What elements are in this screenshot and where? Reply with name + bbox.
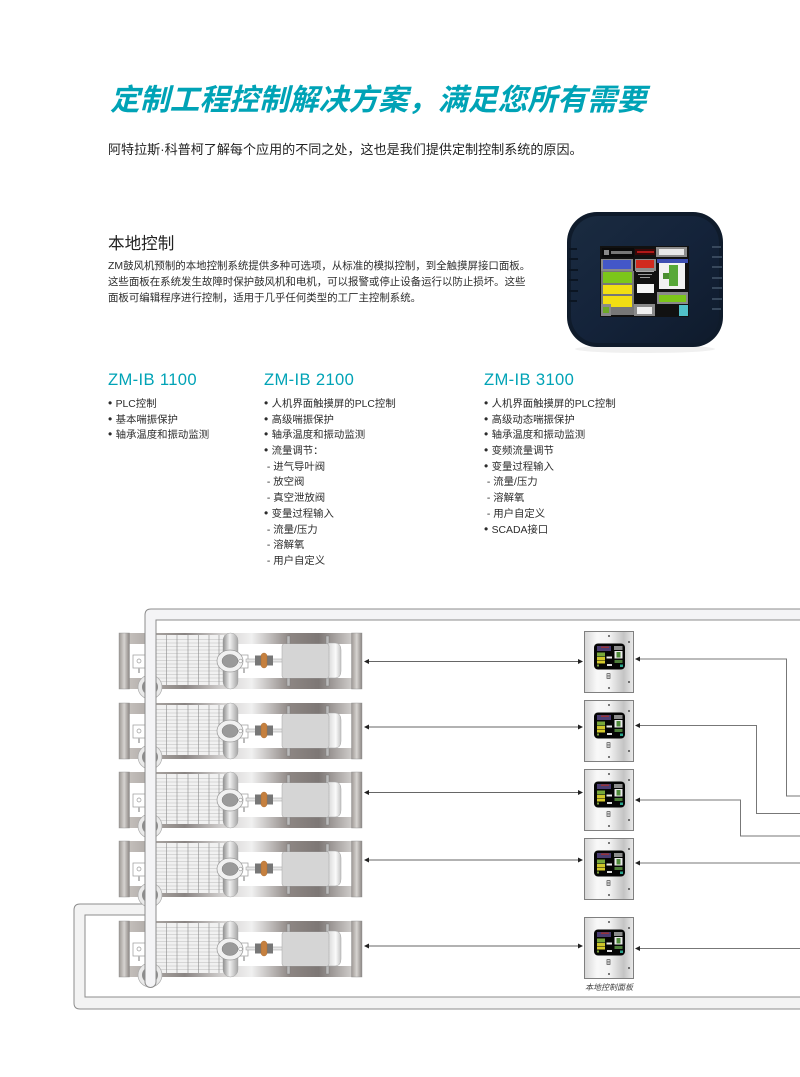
model column: ZM-IB 2100: - 放空阀 [267, 477, 304, 488]
model column: ZM-IB 3100: • 变频流量调节 [484, 443, 554, 457]
blower unit 1 [119, 633, 362, 699]
control panel 1 [584, 632, 634, 692]
title: 定制工程控制解决方案，满足您所有需要 [110, 84, 646, 117]
control panel 5 [584, 918, 634, 978]
model column: ZM-IB 2100: • 流量调节： [264, 443, 324, 457]
model column: ZM-IB 3100 [484, 370, 616, 536]
signal line to panel 4 [635, 860, 800, 866]
arrow: blower 2 to panel 2 [364, 724, 583, 730]
control panel photo [567, 212, 723, 353]
blower unit 4 [119, 841, 362, 907]
process air pipe: outer loop [74, 904, 800, 1009]
local control description [108, 260, 530, 304]
control panel 2 [584, 700, 634, 762]
model column: ZM-IB 3100: - 流量/压力 [487, 477, 538, 488]
process air pipe: main header [145, 609, 800, 988]
model column: ZM-IB 1100: • 轴承温度和振动监测 [108, 427, 209, 441]
model column: ZM-IB 3100: • 高级动态喘振保护 [484, 412, 575, 426]
model column: ZM-IB 3100: - 用户自定义 [487, 509, 545, 520]
local control description: 这些面板在系统发生故障时保护鼓风机和电机，可以报警或停止设备运行以防止损坏。这些 [108, 277, 526, 288]
arrow: blower 3 to panel 3 [364, 790, 583, 795]
model column: ZM-IB 1100 [108, 370, 209, 441]
model column: ZM-IB 1100: ZM-IB 1100 [108, 370, 197, 389]
model column: ZM-IB 2100: - 流量/压力 [267, 524, 318, 536]
model column: ZM-IB 3100: • 轴承温度和振动监测 [484, 427, 585, 441]
model column: ZM-IB 2100: - 进气导叶阀 [267, 462, 325, 473]
arrow: blower 5 to panel 5 [364, 944, 583, 948]
model column: ZM-IB 2100: • 轴承温度和振动监测 [264, 427, 365, 441]
signal line to panel 2 [635, 723, 800, 814]
blower unit 2 [119, 703, 362, 769]
model column: ZM-IB 2100: - 真空泄放阀 [267, 493, 325, 504]
heading: local control: 本地控制 [108, 234, 174, 253]
model column: ZM-IB 2100: - 溶解氧 [267, 540, 304, 551]
local control description: ZM鼓风机预制的本地控制系统提供多种可选项，从标准的模拟控制，到全触摸屏接口面板。 [108, 261, 530, 272]
control panel 4 [584, 838, 634, 900]
model column: ZM-IB 2100: • 人机界面触摸屏的PLC控制 [264, 396, 396, 410]
intro text: 阿特拉斯·科普柯了解每个应用的不同之处，这也是我们提供定制控制系统的原因。 [108, 142, 583, 157]
signal line to panel 5 [635, 946, 800, 951]
model column: ZM-IB 3100: • SCADA接口 [484, 522, 548, 536]
caption: local control panel: 本地控制面板 [585, 983, 634, 992]
model column: ZM-IB 2100 [264, 370, 396, 567]
model column: ZM-IB 2100: ZM-IB 2100 [264, 370, 354, 389]
signal line to panel 1 [635, 656, 800, 796]
control panel 3 [584, 770, 634, 830]
model column: ZM-IB 1100: • PLC控制 [108, 396, 157, 410]
model column: ZM-IB 1100: • 基本喘振保护 [108, 412, 178, 426]
arrow: blower 4 to panel 4 [364, 858, 583, 862]
blower unit 3 [119, 772, 362, 838]
model column: ZM-IB 3100: • 变量过程输入 [484, 459, 554, 473]
model column: ZM-IB 3100: - 溶解氧 [487, 493, 524, 504]
model column: ZM-IB 2100: - 用户自定义 [267, 556, 325, 567]
blower unit 5 [119, 921, 362, 987]
model column: ZM-IB 3100: ZM-IB 3100 [484, 370, 574, 389]
model column: ZM-IB 2100: • 高级喘振保护 [264, 412, 334, 426]
local control description: 面板可编辑程序进行控制，适用于几乎任何类型的工厂主控制系统。 [108, 293, 421, 304]
signal line to panel 3 [635, 798, 800, 836]
arrow: blower 1 to panel 1 [364, 659, 583, 664]
touch screen [600, 246, 689, 317]
model column: ZM-IB 2100: • 变量过程输入 [264, 506, 334, 520]
model column: ZM-IB 3100: • 人机界面触摸屏的PLC控制 [484, 396, 616, 410]
